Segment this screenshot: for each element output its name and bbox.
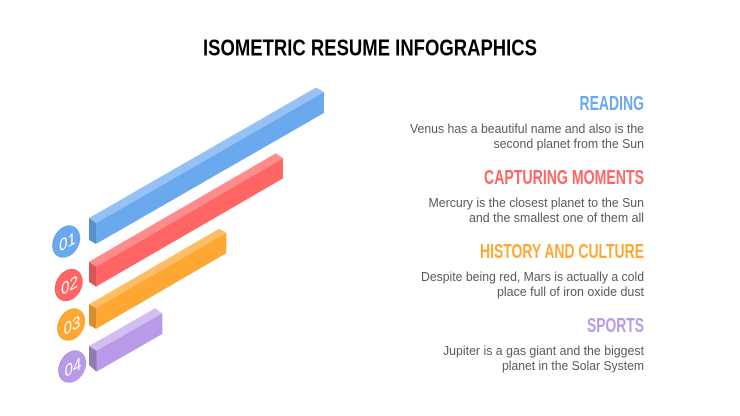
text block: capturing moments: and the smallest one of them all xyxy=(469,210,644,225)
text block: reading: READING xyxy=(580,93,644,115)
badge 03 xyxy=(52,304,91,345)
bar 02: red xyxy=(89,153,283,287)
bar 04: purple xyxy=(89,308,162,372)
badge 03: 03 xyxy=(64,312,80,339)
text block: capturing moments xyxy=(428,167,644,225)
text block: capturing moments: Mercury is the closest planet to the Sun xyxy=(428,195,644,210)
text block: history and culture: HISTORY AND CULTURE xyxy=(480,241,644,263)
badge 02 xyxy=(49,264,88,306)
text block: capturing moments: CAPTURING MOMENTS xyxy=(484,167,644,189)
text block: history and culture: Despite being red, Mars is actually a cold xyxy=(421,269,644,284)
chart: isometric bars xyxy=(89,88,324,372)
text block: history and culture xyxy=(421,241,644,299)
badge 04 xyxy=(53,346,92,387)
text block: sports: planet in the Solar System xyxy=(502,358,644,373)
text block: reading: Venus has a beautiful name and also is the xyxy=(410,121,644,136)
text block: reading: second planet from the Sun xyxy=(494,136,644,151)
badge 01: 01 xyxy=(59,228,76,256)
badge 02: 02 xyxy=(61,272,78,299)
text block: sports: SPORTS xyxy=(587,315,644,337)
text block: sports: Jupiter is a gas giant and the biggest xyxy=(443,343,644,358)
text block: history and culture: place full of iron oxide dust xyxy=(497,284,644,299)
badge 01 xyxy=(47,221,86,262)
bar 03: orange xyxy=(89,229,226,329)
bar 01: blue xyxy=(89,88,324,244)
text block: reading xyxy=(410,93,644,151)
badge 04: 04 xyxy=(65,354,81,381)
text block: sports xyxy=(443,315,644,373)
title: ISOMETRIC RESUME INFOGRAPHICS xyxy=(203,34,537,60)
